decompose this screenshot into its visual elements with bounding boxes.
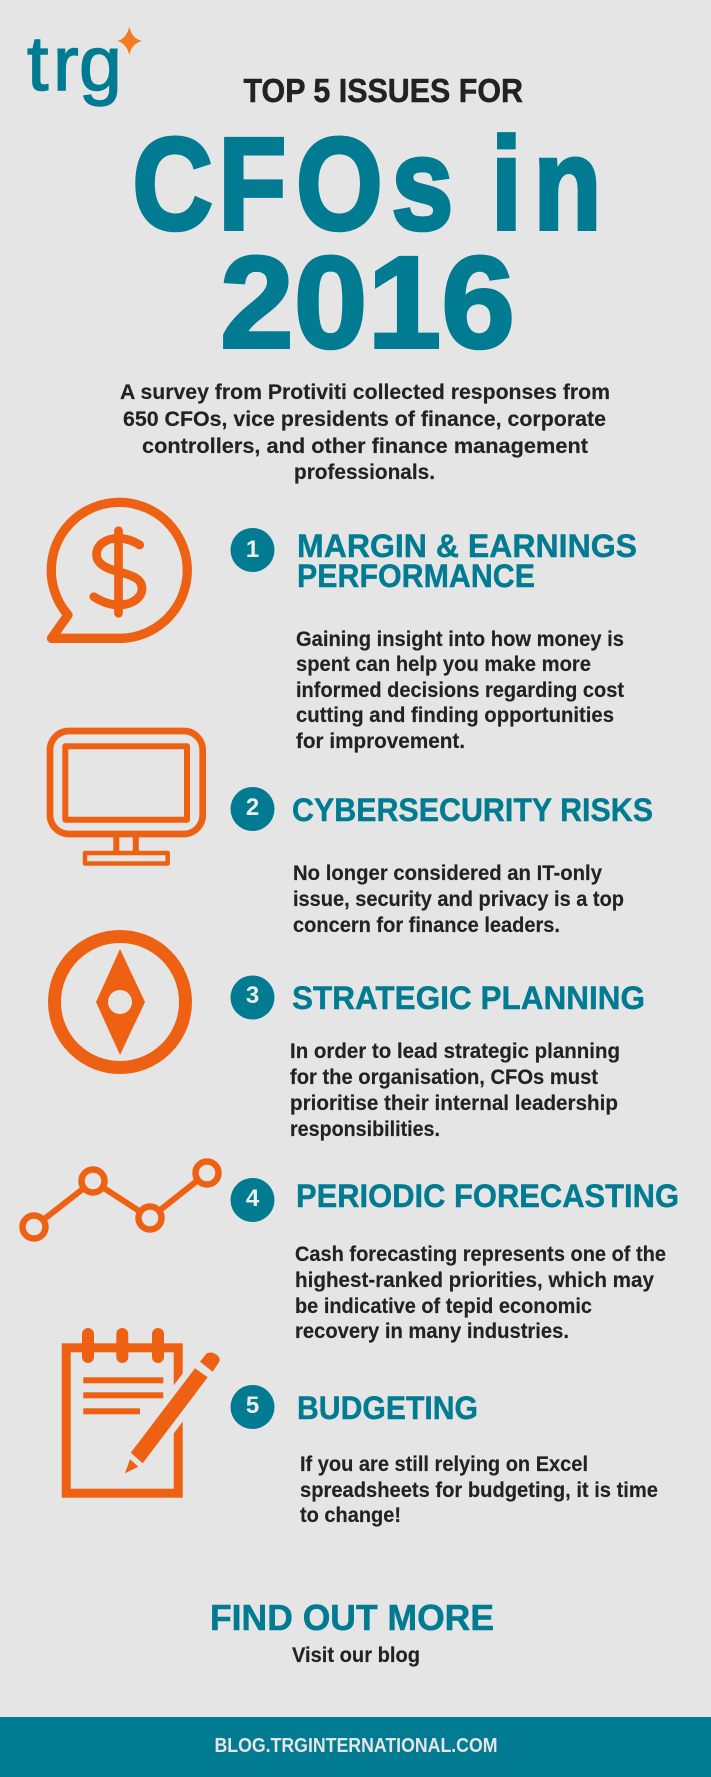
intro text: controllers, and other finance management [142,435,588,458]
icon: dollar speech bubble [51,502,187,638]
number badge 4 [230,1178,274,1222]
title line 2: 2016 [220,228,515,376]
body 1: Gaining insight into how money is [296,628,624,651]
heading 1: MARGIN & EARNINGS [297,528,637,564]
body 3 [290,1040,620,1141]
number badge 5: 5 [246,1392,259,1419]
visit our blog: Visit our blog [292,1644,420,1667]
heading 3: STRATEGIC PLANNING [292,980,645,1016]
number badge 2 [230,787,274,831]
body 2 [293,862,624,937]
panel: issue 4 [22,1162,679,1343]
intro text: 650 CFOs, vice presidents of finance, corporate [123,408,606,431]
panel: issue 2 [50,731,653,937]
heading 2: CYBERSECURITY RISKS [292,792,653,828]
body 4 [295,1243,666,1343]
subtitle: TOP 5 ISSUES FOR [244,72,523,109]
body 5: If you are still relying on Excel [300,1453,588,1476]
body 1: for improvement. [296,730,465,753]
heading 1 [297,528,637,594]
logo: trg: trg [27,21,122,107]
heading 4: PERIODIC FORECASTING [296,1178,679,1214]
body 1: cutting and finding opportunities [296,704,614,727]
panel: issue 1 [51,502,637,753]
icon: monitor [50,731,203,864]
body 4: be indicative of tepid economic [295,1295,592,1318]
find out more heading: FIND OUT MORE [210,1597,494,1638]
number badge 4: 4 [246,1185,260,1212]
call to action [210,1597,494,1667]
body 1: spent can help you make more [296,653,591,676]
header block [132,72,601,376]
panel: issue 3 [54,936,645,1141]
panel: issue 5 [66,1334,658,1527]
number badge 3: 3 [246,982,259,1009]
title line 1: CFOs in [132,110,601,257]
icon: compass [54,936,186,1068]
body 3: responsibilities. [290,1118,440,1141]
body 5: to change! [300,1504,401,1527]
footer band [0,1717,711,1777]
number badge 2: 2 [246,794,259,821]
icon: line chart [22,1162,218,1238]
heading 1: PERFORMANCE [297,558,535,594]
number badge 1: 1 [246,536,259,563]
footer url: BLOG.TRGINTERNATIONAL.COM [214,1735,498,1757]
number badge 5 [230,1385,274,1429]
body 3: prioritise their internal leadership [290,1092,618,1115]
body 2: concern for finance leaders. [293,914,560,937]
intro text [120,381,610,484]
icon: orange star [118,26,142,55]
intro text: professionals. [294,461,435,484]
body 4: Cash forecasting represents one of the [295,1243,666,1266]
body 2: issue, security and privacy is a top [293,888,624,911]
body 3: for the organisation, CFOs must [290,1066,598,1089]
body 5 [300,1453,658,1527]
body 4: highest-ranked priorities, which may [295,1269,654,1292]
body 1: informed decisions regarding cost [296,679,624,702]
icon: notepad and pencil [66,1334,220,1493]
number badge 3 [230,976,274,1020]
heading 5: BUDGETING [297,1390,478,1426]
body 4: recovery in many industries. [295,1320,569,1343]
body 5: spreadsheets for budgeting, it is time [300,1479,658,1502]
body 3: In order to lead strategic planning [290,1040,620,1063]
body 1 [296,628,624,753]
number badge 1 [230,528,274,572]
intro text: A survey from Protiviti collected responses from [120,381,610,404]
body 2: No longer considered an IT-only [293,862,602,885]
